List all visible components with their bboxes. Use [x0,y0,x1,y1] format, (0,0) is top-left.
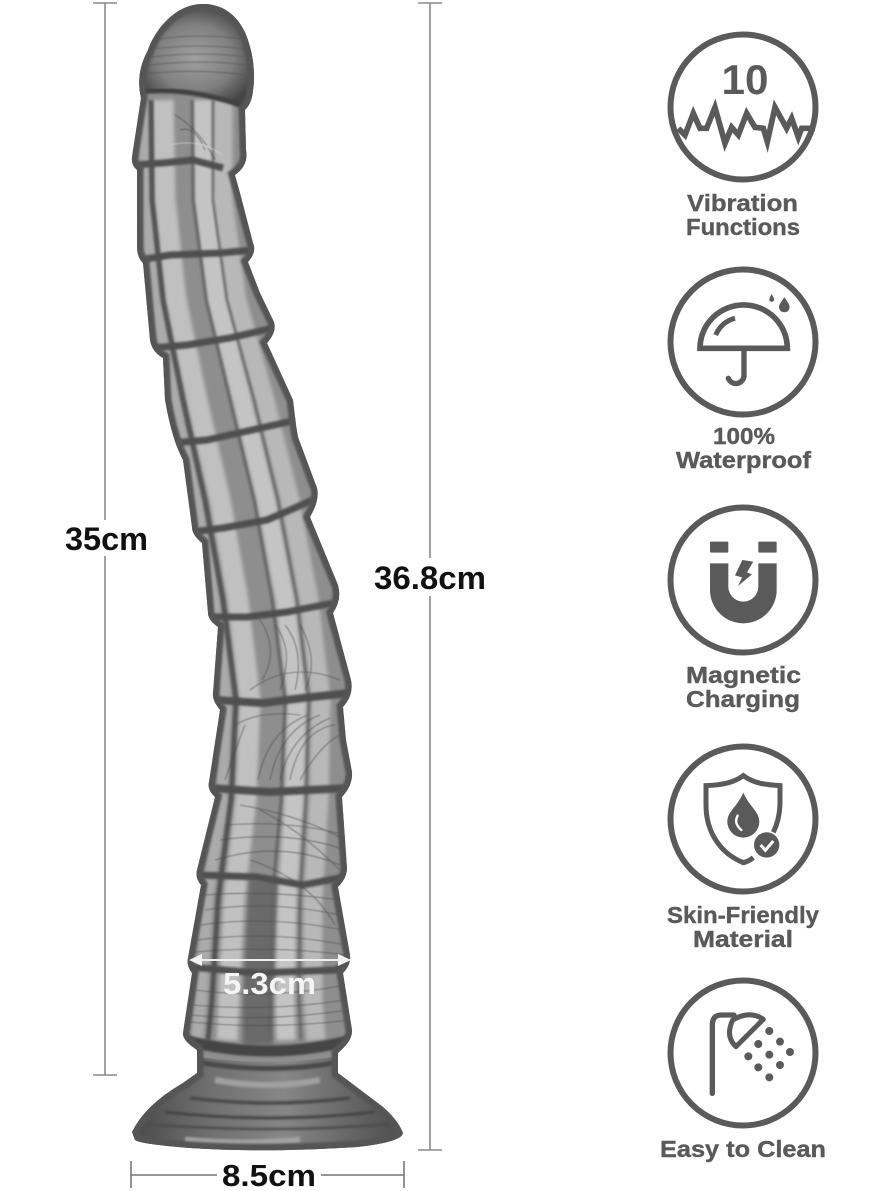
suction base [133,1058,402,1150]
label: easy to clean: Easy to Clean [660,1136,826,1162]
edge shading [132,4,403,1150]
dimension: 35cm height [65,3,149,1075]
icon: skin-friendly shield [670,746,816,892]
dimension: 8.5cm base [131,1158,404,1191]
dimension: 36.8cm length [374,3,487,1150]
label: 100% waterproof: Waterproof [676,447,811,473]
label: magnetic charging [686,662,801,712]
label: vibration functions: Functions [686,214,800,240]
label: skin-friendly material: Skin-Friendly [667,902,819,928]
icon: vibration functions [670,34,816,180]
label: 100% waterproof: 100% [713,423,775,449]
ridges [133,160,352,1051]
label: magnetic charging: Magnetic [686,662,801,688]
icon: magnetic charging [670,508,816,652]
label: vibration functions: Vibration [687,190,798,216]
dimension: 5.3cm width: 5.3cm [223,966,316,1001]
label: vibration functions [686,190,800,240]
label: 100% waterproof [676,423,811,473]
dimension: 36.8cm length: 36.8cm [374,560,486,596]
dimension: 35cm height: 35cm [65,521,148,557]
icon: waterproof umbrella [670,270,816,414]
cap [139,4,254,108]
icon: easy to clean shower [670,980,816,1126]
label: skin-friendly material [667,902,819,952]
label: magnetic charging: Charging [686,686,800,712]
icon: vibration functions: 10 [722,56,768,103]
dimension: 5.3cm width [189,954,351,1001]
fibre texture [170,115,350,1026]
label: skin-friendly material: Material [693,926,793,952]
product body illustration [132,4,403,1150]
